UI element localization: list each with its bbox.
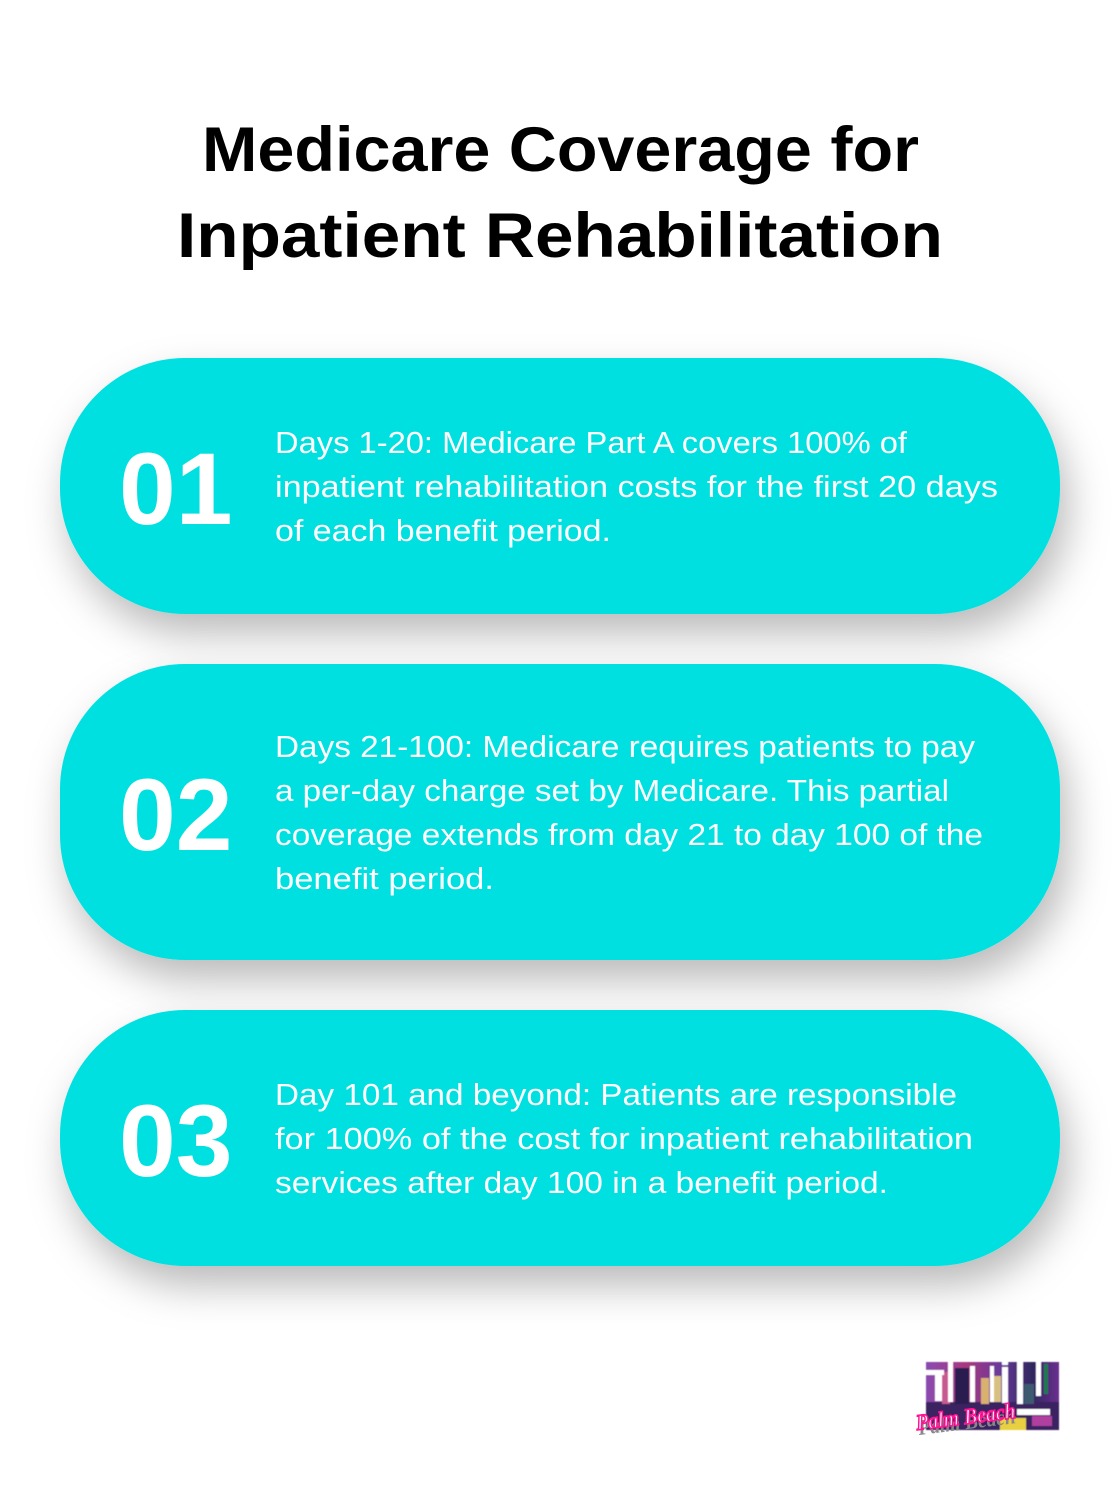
number 02: 02	[119, 758, 232, 872]
title: Medicare Coverage for	[202, 115, 919, 185]
logo: Amitay Palm Beach: Palm Beach	[914, 1398, 1017, 1435]
text block 1: Days 1-20: Medicare Part A covers 100% of	[275, 425, 907, 460]
text block 1	[275, 425, 998, 548]
logo: Amitay Palm Beach	[914, 1357, 1059, 1440]
number 01: 01	[119, 432, 232, 546]
text block 3	[275, 1077, 973, 1200]
title	[177, 115, 943, 271]
text block 1: inpatient rehabilitation costs for the first 20 days	[275, 469, 998, 504]
title: Inpatient Rehabilitation	[177, 201, 943, 271]
card background 3	[60, 1010, 1060, 1266]
text block 2: coverage extends from day 21 to day 100 of the	[275, 817, 983, 852]
card background 2	[60, 664, 1060, 960]
panel: days 1-20	[60, 358, 1060, 614]
text block 2: Days 21-100: Medicare requires patients to pay	[275, 729, 976, 764]
text block 3: for 100% of the cost for inpatient rehabilitation	[275, 1121, 973, 1156]
panel: day 101 and beyond	[60, 1010, 1060, 1266]
logo: Amitay Palm Beach: Palm Beach	[916, 1403, 1017, 1440]
card background 1	[60, 358, 1060, 614]
text block 3: Day 101 and beyond: Patients are responsible	[275, 1077, 957, 1112]
text block 2: a per-day charge set by Medicare. This partial	[275, 773, 949, 808]
text block 3: services after day 100 in a benefit period.	[275, 1165, 888, 1200]
number 03: 03	[119, 1084, 232, 1198]
text block 1: of each benefit period.	[275, 513, 611, 548]
panel: days 21-100	[60, 664, 1060, 960]
text block 2: benefit period.	[275, 861, 494, 896]
text block 2	[275, 729, 983, 896]
